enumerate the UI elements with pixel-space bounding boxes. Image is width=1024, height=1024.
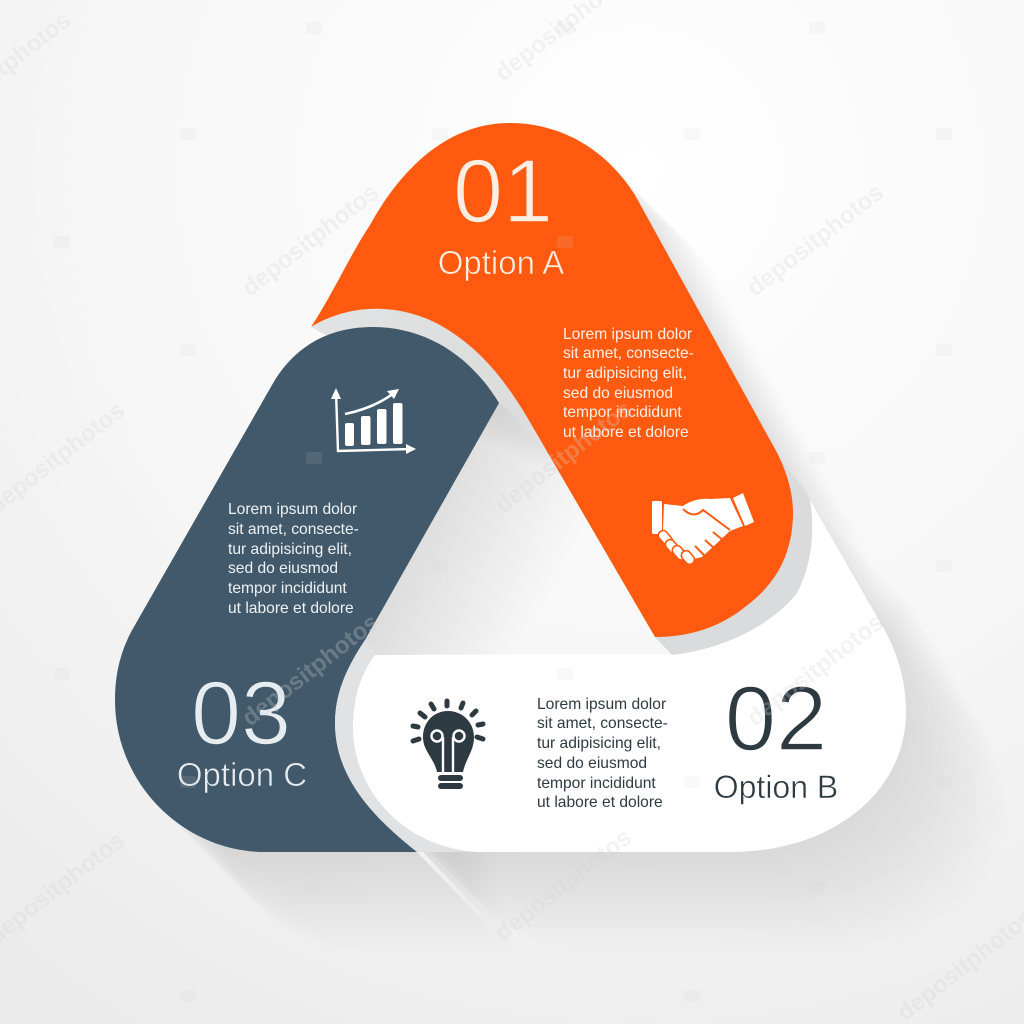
shadow band under orange arc xyxy=(311,309,536,432)
shadow band around white segment xyxy=(335,640,490,852)
watermarks: depositphotos xyxy=(742,609,889,732)
shadow band under orange tail xyxy=(655,462,812,655)
panel: 01 Option A orange segment xyxy=(311,123,793,637)
text block: option C body: Lorem ipsum dolor xyxy=(228,501,357,518)
text block: option A body: tempor incididunt xyxy=(563,404,682,421)
heading: Option C: Option C xyxy=(177,756,307,793)
panel: 02 Option B white segment xyxy=(353,500,906,852)
heading: 01: 01 xyxy=(453,142,553,242)
heading: 03: 03 xyxy=(191,664,291,764)
text block: option A body: Lorem ipsum dolor xyxy=(563,326,692,343)
long shadow: orange segment xyxy=(314,126,873,717)
text block: option B body: tur adipisicing elit, xyxy=(537,735,661,752)
text block: option C body: sit amet, consecte- xyxy=(228,521,359,538)
icon: light bulb xyxy=(413,701,483,789)
text block: option B body: sed do eiusmod xyxy=(537,755,647,772)
text block: option C body xyxy=(228,501,359,617)
icon: bar chart xyxy=(331,388,416,454)
watermarks: depositphotos xyxy=(490,824,637,947)
panel: 03 Option C slate segment xyxy=(115,327,499,852)
text block: option A body xyxy=(563,326,694,441)
light streak under junction xyxy=(417,852,512,945)
text block: option A body: sit amet, consecte- xyxy=(563,345,694,362)
text block: option A body: ut labore et dolore xyxy=(563,424,689,441)
text block: option A body: tur adipisicing elit, xyxy=(563,365,687,382)
icon: handshake xyxy=(652,493,754,566)
watermarks: depositphotos xyxy=(237,609,384,732)
text block: option C body: tempor incididunt xyxy=(228,580,347,597)
heading: Option A: Option A xyxy=(438,244,564,281)
text block: option A body: sed do eiusmod xyxy=(563,385,673,402)
long shadow: white segment xyxy=(357,504,1006,952)
watermarks: depositphotos xyxy=(490,396,637,519)
heading: Option B: Option B xyxy=(714,769,838,805)
text block: option B body xyxy=(537,696,668,811)
text block: option B body: Lorem ipsum dolor xyxy=(537,696,666,713)
text block: option C body: ut labore et dolore xyxy=(228,600,354,617)
text block: option B body: ut labore et dolore xyxy=(537,794,663,811)
text block: option C body: sed do eiusmod xyxy=(228,560,338,577)
watermarks: depositphotos xyxy=(237,179,384,302)
long shadow: slate segment xyxy=(119,331,599,952)
watermarks: depositphotos xyxy=(742,179,889,302)
text block: option C body: tur adipisicing elit, xyxy=(228,541,352,558)
heading: 02: 02 xyxy=(725,668,827,770)
text block: option B body: tempor incididunt xyxy=(537,775,656,792)
text block: option B body: sit amet, consecte- xyxy=(537,715,668,732)
